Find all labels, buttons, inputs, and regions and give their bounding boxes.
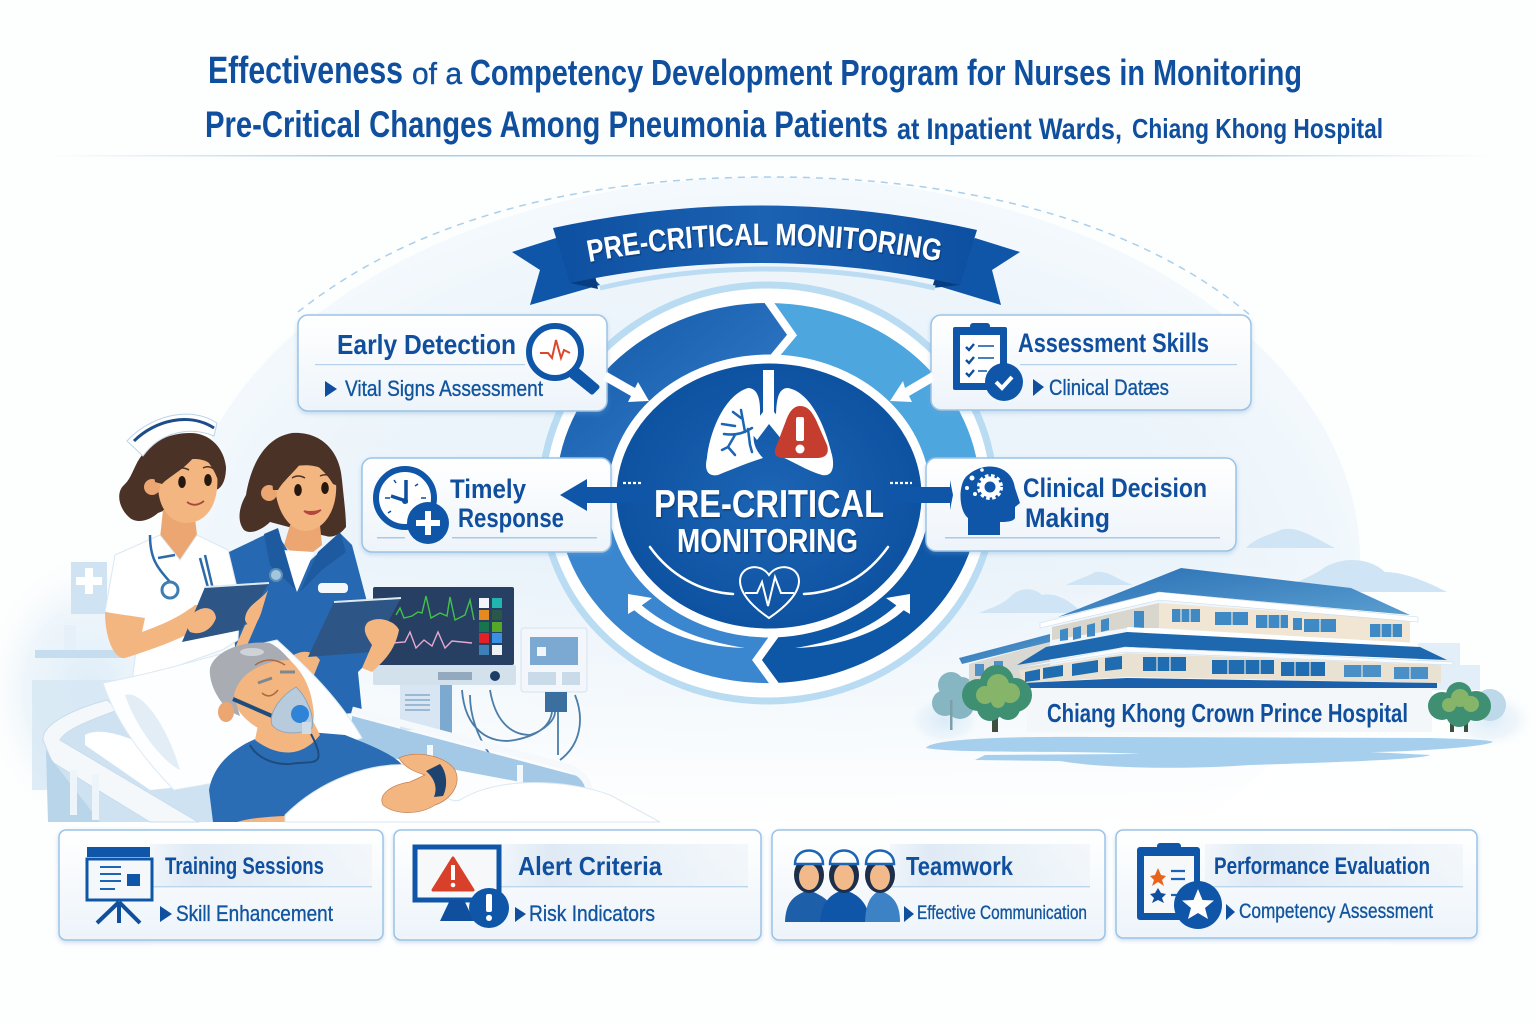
pillow bbox=[103, 640, 362, 790]
title: of a bbox=[412, 56, 463, 91]
equipment: monitor bbox=[373, 587, 516, 735]
panel: early detection bbox=[298, 315, 607, 411]
ward background bbox=[32, 562, 125, 790]
banner: pre-critical monitoring bbox=[512, 206, 1020, 305]
background dome bbox=[150, 175, 1390, 945]
center label: MONITORING bbox=[677, 522, 858, 559]
icon: magnifier bbox=[529, 326, 597, 392]
central circular diagram bbox=[542, 285, 994, 701]
panel: performance evaluation bbox=[1116, 830, 1477, 938]
panel: timely response: Timely bbox=[450, 474, 526, 504]
panel: timely response bbox=[362, 458, 611, 552]
icon: three nurses bbox=[785, 850, 900, 922]
panel: early detection: Vital Signs Assessment bbox=[345, 376, 544, 401]
center label: PRE-CRITICAL bbox=[654, 483, 884, 526]
blanket bbox=[285, 765, 660, 822]
panel: alert criteria: Risk Indicators bbox=[529, 901, 655, 926]
nurse in white uniform bbox=[105, 414, 240, 682]
title bbox=[205, 50, 1383, 146]
arrow: early detection to center bbox=[603, 372, 649, 402]
panel: performance evaluation: Performance Evaluation bbox=[1214, 853, 1430, 880]
icon: evaluation clipboard bbox=[1137, 843, 1222, 929]
panel: training sessions: Skill Enhancement bbox=[176, 901, 333, 926]
panel: assessment skills bbox=[931, 315, 1251, 410]
bottom cycle arrows bbox=[628, 594, 910, 648]
tablets held by nurses bbox=[182, 583, 401, 680]
hospital scene bbox=[905, 529, 1535, 768]
panel: teamwork: Effective Communication bbox=[917, 903, 1087, 924]
icon: presentation board bbox=[87, 847, 152, 923]
panel: clinical decision making: Clinical Decision bbox=[1023, 473, 1207, 503]
panel: performance evaluation: Competency Assessment bbox=[1239, 900, 1433, 923]
trees front bbox=[962, 665, 1491, 732]
equipment: infusion device and cables bbox=[462, 628, 587, 760]
arrow: center to timely response bbox=[560, 479, 650, 511]
panel: assessment skills: Assessment Skills bbox=[1018, 328, 1209, 358]
panel: teamwork: Teamwork bbox=[906, 851, 1013, 881]
patient hands and watch bbox=[382, 754, 457, 812]
hospital bed bbox=[43, 700, 590, 822]
panel: clinical decision making: Making bbox=[1025, 503, 1110, 533]
name board: Chiang Khong Crown Prince Hospital bbox=[1047, 698, 1408, 728]
panel: assessment skills: Clinical Datæs bbox=[1049, 375, 1169, 400]
clouds bbox=[979, 529, 1447, 613]
water reflection bbox=[926, 737, 1493, 768]
main building bbox=[1052, 603, 1159, 640]
icon: clock with plus bbox=[376, 469, 449, 544]
panel: alert criteria bbox=[394, 830, 761, 940]
icon: clipboard bbox=[953, 323, 1023, 401]
title: at Inpatient Wards, bbox=[897, 113, 1122, 146]
panel: teamwork bbox=[772, 830, 1105, 940]
patient bbox=[209, 642, 402, 822]
title: Competency Development Program for Nurses in Monitoring bbox=[470, 52, 1302, 93]
banner: pre-critical monitoring: PRE-CRITICAL MONITORING bbox=[586, 224, 942, 264]
panel: alert criteria: Alert Criteria bbox=[518, 851, 662, 881]
arrow: center to clinical decision making bbox=[888, 480, 953, 510]
title: Pre-Critical Changes Among Pneumonia Patients bbox=[205, 104, 888, 145]
icon: head with gear bbox=[960, 466, 1020, 535]
panel: early detection: Early Detection bbox=[337, 329, 516, 360]
left wing bbox=[969, 642, 1050, 690]
center label bbox=[654, 483, 884, 559]
panel: clinical decision making bbox=[926, 458, 1236, 551]
center heart pulse bbox=[650, 547, 888, 618]
trees behind bbox=[932, 672, 1506, 730]
panel: training sessions bbox=[59, 830, 383, 940]
name board bbox=[1027, 688, 1432, 732]
panel: training sessions: Training Sessions bbox=[165, 853, 324, 880]
title: Chiang Khong Hospital bbox=[1132, 113, 1383, 144]
arrow: assessment skills to center bbox=[890, 372, 933, 402]
center lungs icon bbox=[706, 370, 833, 475]
illustration: nurses and patient bbox=[0, 414, 660, 830]
title: Effectiveness bbox=[208, 50, 403, 92]
icon: alert monitor bbox=[415, 847, 509, 928]
panel: timely response: Response bbox=[458, 503, 564, 533]
nurse in blue uniform bbox=[229, 433, 375, 725]
